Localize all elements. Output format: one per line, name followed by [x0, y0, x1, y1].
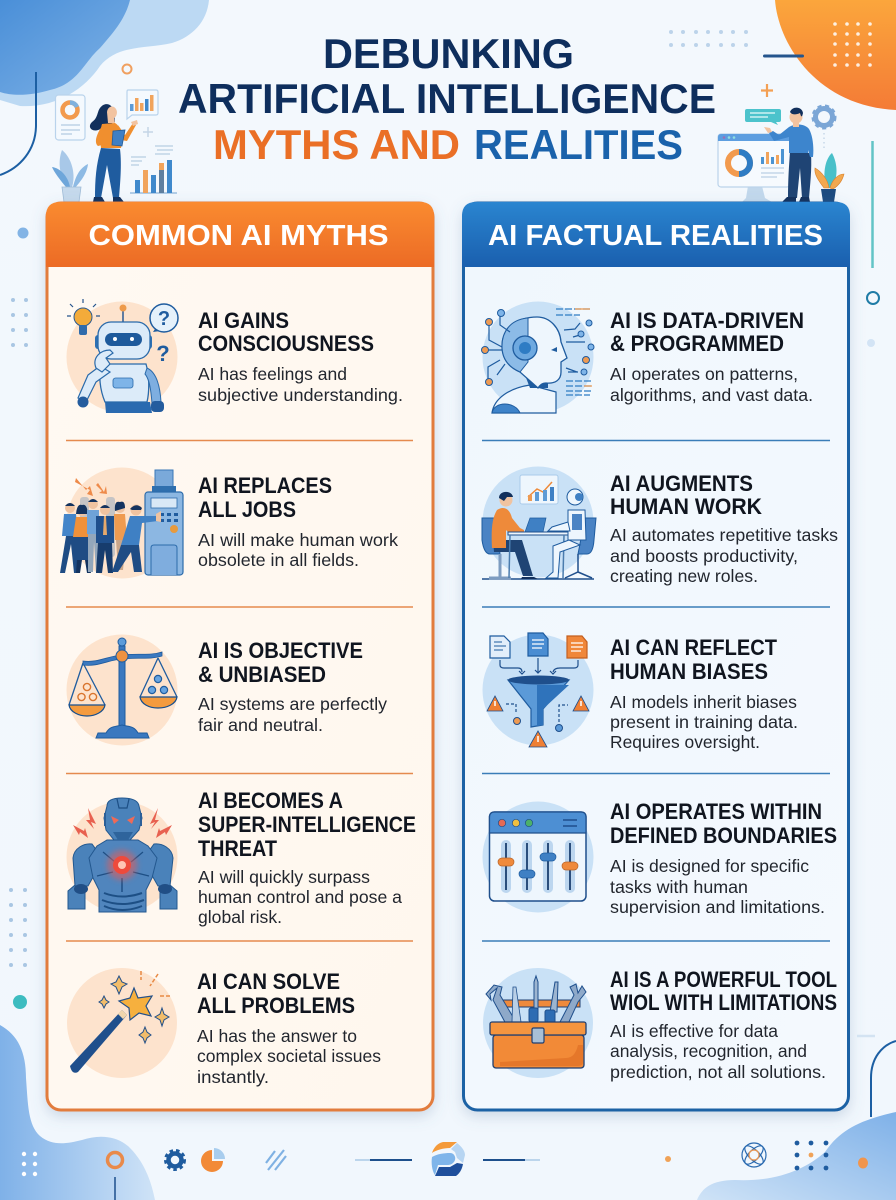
icon: orange ring	[108, 1152, 122, 1200]
reality 1: AI is data-driven and programmed	[482, 302, 813, 413]
panel header: realities	[462, 202, 850, 267]
myth 3: AI is objective and unbiased: AI IS OBJECTIVE	[198, 638, 363, 663]
icon: thinking robot: ?	[156, 341, 170, 366]
myth 2: AI replaces all jobs: AI will make human work	[198, 530, 398, 550]
icon: human and robot at desk	[482, 466, 596, 579]
background: bottom-left blob	[0, 1025, 155, 1200]
title: DEBUNKING	[323, 30, 574, 77]
reality 4: AI operates within defined boundaries	[482, 799, 837, 917]
myth 5: AI can solve all problems: AI has the answer to	[197, 1026, 357, 1046]
reality 5: AI is a powerful tool with limitations: prediction, not all solutions.	[610, 1062, 826, 1082]
icon: biased data funnel	[482, 633, 594, 747]
myth 5: AI can solve all problems: instantly.	[197, 1067, 269, 1087]
reality 2: AI augments human work	[482, 466, 838, 586]
reality 1: AI is data-driven and programmed: algorithms, and vast data.	[610, 385, 813, 405]
icon: diagonal stripes	[266, 1150, 286, 1170]
panel header: myths	[46, 202, 434, 267]
icon: potted plant	[52, 150, 88, 202]
icon: workers and machine	[60, 468, 183, 578]
reality 3: AI can reflect human biases: present in training data.	[610, 712, 798, 732]
illustration: woman with charts	[52, 90, 177, 202]
icon: pie chart	[201, 1148, 225, 1172]
myth 2: AI replaces all jobs: AI REPLACES	[198, 473, 332, 498]
reality 5: AI is a powerful tool with limitations: analysis, recognition, and	[610, 1041, 807, 1061]
reality 3: AI can reflect human biases: HUMAN BIASES	[610, 659, 768, 684]
panel header: realities: AI FACTUAL REALITIES	[488, 220, 823, 252]
icon: control sliders window	[482, 802, 594, 912]
myth 1: AI gains consciousness: subjective understanding.	[198, 385, 403, 405]
myth 1: AI gains consciousness: AI has feelings and	[198, 364, 347, 384]
myth 5: AI can solve all problems	[67, 968, 381, 1087]
icon: gear	[166, 1150, 184, 1170]
reality 4: AI operates within defined boundaries: supervision and limitations.	[610, 897, 825, 917]
myth 4: AI becomes a super-intelligence threat: AI will quickly surpass	[198, 867, 370, 887]
panel: common AI myths	[46, 202, 434, 1110]
icon: toolbox	[483, 968, 593, 1078]
myth 5: AI can solve all problems: complex societal issues	[197, 1046, 381, 1066]
icon: magic wand	[67, 968, 177, 1078]
reality 2: AI augments human work: AI AUGMENTS	[610, 471, 753, 496]
reality 5: AI is a powerful tool with limitations	[483, 967, 837, 1082]
reality 3: AI can reflect human biases: Requires oversight.	[610, 732, 760, 752]
myth 4: AI becomes a super-intelligence threat: human control and pose a	[198, 887, 402, 907]
icon: potted plant	[815, 153, 844, 202]
illustration: man with dashboard	[718, 106, 844, 202]
myth 5: AI can solve all problems: AI CAN SOLVE	[197, 969, 340, 994]
figure: man	[764, 108, 813, 202]
reality 3: AI can reflect human biases: AI CAN REFLECT	[610, 635, 778, 660]
title: REALITIES	[474, 121, 683, 168]
myth 4: AI becomes a super-intelligence threat: AI BECOMES A	[198, 788, 343, 813]
myth 4: AI becomes a super-intelligence threat: THREAT	[198, 836, 277, 861]
reality 1: AI is data-driven and programmed: AI IS DATA-DRIVEN	[610, 308, 804, 333]
icon: thinking robot: ?	[158, 308, 170, 330]
myth 5: AI can solve all problems: ALL PROBLEMS	[197, 993, 355, 1018]
icon: AI head with circuits	[482, 302, 594, 413]
icon: gear	[813, 106, 835, 150]
panel: AI factual realities	[462, 202, 850, 1110]
reality 5: AI is a powerful tool with limitations: AI IS A POWERFUL TOOL	[610, 967, 837, 992]
icon: thinking robot	[66, 299, 178, 413]
reality 5: AI is a powerful tool with limitations: WIOL WITH LIMITATIONS	[610, 990, 837, 1015]
reality 4: AI operates within defined boundaries: AI OPERATES WITHIN	[610, 799, 822, 824]
reality 3: AI can reflect human biases	[482, 633, 798, 752]
footer icon row	[108, 1141, 868, 1200]
myth 1: AI gains consciousness: AI GAINS	[198, 308, 289, 333]
myth 1: AI gains consciousness: CONSCIOUSNESS	[198, 331, 374, 356]
reality 2: AI augments human work: and boosts productivity,	[610, 546, 798, 566]
icon: network globe	[742, 1143, 766, 1167]
reality 5: AI is a powerful tool with limitations: AI is effective for data	[610, 1021, 778, 1041]
icon: donut report card	[56, 95, 85, 140]
myth 4: AI becomes a super-intelligence threat: global risk.	[198, 907, 282, 927]
reality 1: AI is data-driven and programmed: & PROGRAMMED	[610, 331, 784, 356]
myth 3: AI is objective and unbiased: fair and neutral.	[198, 715, 323, 735]
myth 3: AI is objective and unbiased: & UNBIASED	[198, 662, 326, 687]
myth 4: AI becomes a super-intelligence threat	[66, 788, 416, 927]
myth 3: AI is objective and unbiased: AI systems are perfectly	[198, 694, 387, 714]
panel header: myths: COMMON AI MYTHS	[88, 220, 388, 252]
icon: orange dot right	[858, 1158, 868, 1168]
icon: menacing robot	[66, 798, 178, 912]
myth 2: AI replaces all jobs	[60, 468, 398, 578]
reality 4: AI operates within defined boundaries: DEFINED BOUNDARIES	[610, 823, 837, 848]
background: top-right orange blob	[775, 0, 896, 110]
figure: woman	[90, 104, 138, 202]
myth 4: AI becomes a super-intelligence threat: SUPER-INTELLIGENCE	[198, 812, 416, 837]
myth 2: AI replaces all jobs: obsolete in all fields.	[198, 550, 359, 570]
icon: bar chart	[130, 127, 177, 193]
icon: balance scale	[66, 634, 178, 746]
title	[178, 30, 716, 168]
icon: dashboard monitor	[718, 134, 790, 202]
myth 2: AI replaces all jobs: ALL JOBS	[198, 497, 296, 522]
myth 3: AI is objective and unbiased	[66, 634, 387, 746]
reality 2: AI augments human work: AI automates repetitive tasks	[610, 525, 838, 545]
reality 1: AI is data-driven and programmed: AI operates on patterns,	[610, 364, 798, 384]
icon: dot grid	[795, 1141, 828, 1170]
icon: chart bubble	[127, 90, 158, 119]
title: MYTHS AND	[213, 121, 460, 168]
icon: orange dot	[665, 1156, 671, 1162]
reality 2: AI augments human work: creating new roles.	[610, 566, 758, 586]
background: top-left blobs	[0, 0, 209, 106]
reality 3: AI can reflect human biases: AI models inherit biases	[610, 692, 797, 712]
reality 4: AI operates within defined boundaries: tasks with human	[610, 877, 748, 897]
background: bottom-right blob	[697, 1036, 896, 1200]
footer logo with side rules	[355, 1142, 540, 1176]
icon: chat bubble	[745, 109, 781, 125]
reality 4: AI operates within defined boundaries: AI is designed for specific	[610, 856, 809, 876]
reality 2: AI augments human work: HUMAN WORK	[610, 494, 762, 519]
title: ARTIFICIAL INTELLIGENCE	[178, 75, 716, 122]
myth 1: AI gains consciousness	[66, 299, 403, 413]
